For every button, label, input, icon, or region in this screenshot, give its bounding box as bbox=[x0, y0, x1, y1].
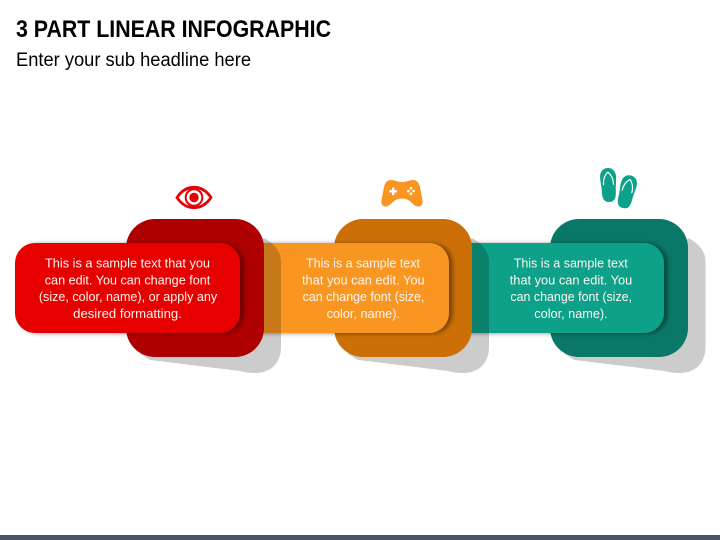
orange body text: This is a sample text bbox=[306, 256, 420, 270]
orange back square bbox=[334, 219, 472, 357]
orange body text: that you can edit. You bbox=[302, 272, 425, 288]
icon: eye bbox=[177, 187, 211, 208]
teal cast shadow bbox=[564, 238, 706, 373]
panel: orange step bbox=[200, 219, 489, 373]
red body text bbox=[39, 256, 217, 321]
orange text bar bbox=[200, 243, 449, 333]
red body text: This is a sample text that you bbox=[45, 256, 210, 270]
red body text: desired formatting. bbox=[73, 306, 182, 321]
left flip flop bbox=[600, 168, 617, 202]
red body text: (size, color, name), or apply any bbox=[39, 289, 217, 304]
footer bar bbox=[0, 535, 720, 540]
orange body text bbox=[302, 256, 425, 321]
red back square bbox=[126, 219, 264, 357]
icon: flip flops bbox=[600, 168, 639, 210]
title: 3 PART LINEAR INFOGRAPHIC bbox=[16, 16, 331, 43]
teal text bar bbox=[420, 243, 664, 333]
subtitle: Enter your sub headline here bbox=[16, 50, 251, 71]
teal body text: This is a sample text bbox=[514, 256, 628, 270]
red body text: can edit. You can change font bbox=[45, 272, 211, 288]
panel: red step bbox=[15, 219, 281, 373]
red text bar bbox=[15, 243, 240, 333]
orange cast shadow bbox=[348, 238, 489, 373]
panel: teal step bbox=[420, 219, 706, 373]
teal body text: that you can edit. You bbox=[510, 272, 632, 288]
teal back square bbox=[550, 219, 688, 357]
orange body text: color, name). bbox=[327, 306, 400, 321]
icon: game controller bbox=[381, 180, 423, 206]
teal body text: color, name). bbox=[534, 306, 608, 321]
right flip flop bbox=[615, 174, 639, 210]
orange body text: can change font (size, bbox=[303, 289, 424, 304]
teal body text bbox=[510, 256, 632, 321]
teal body text: can change font (size, bbox=[510, 289, 632, 304]
red cast shadow bbox=[140, 238, 281, 373]
